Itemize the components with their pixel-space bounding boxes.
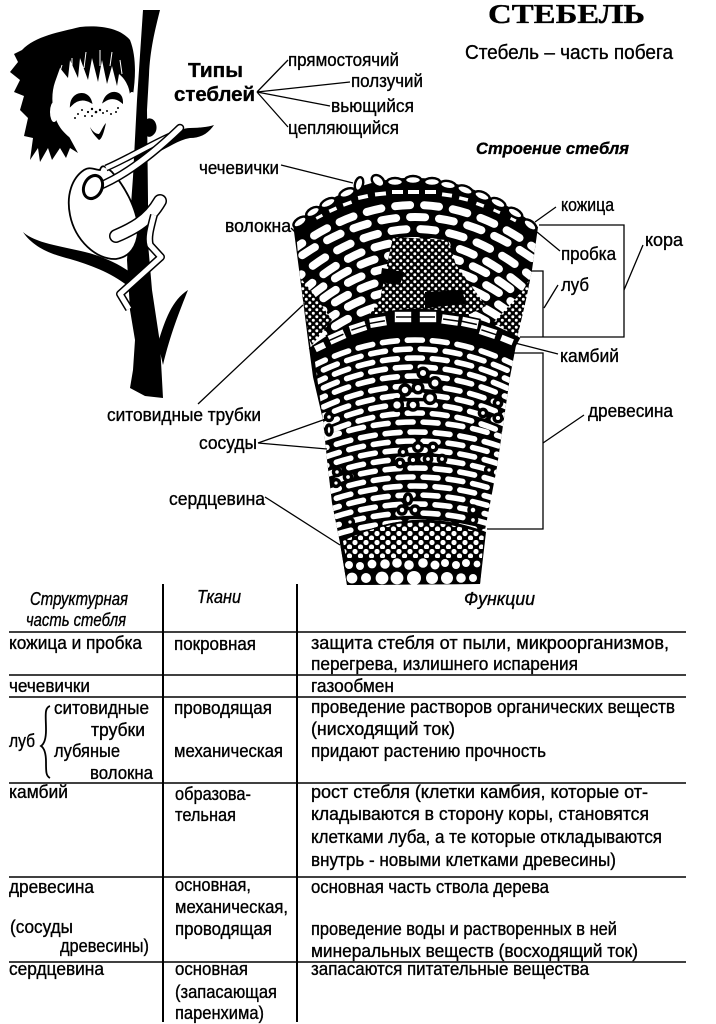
diagram labels and leaders: камбий bbox=[560, 346, 619, 366]
row: phloem: придают растению прочность bbox=[311, 741, 546, 761]
phloem cluster bbox=[370, 237, 486, 314]
ears bbox=[50, 92, 136, 122]
table header: Структурная bbox=[30, 589, 128, 609]
row: cambium: образова- bbox=[175, 784, 251, 804]
row: pith: запасаются питательные вещества bbox=[311, 959, 590, 979]
row: cambium: рост стебля (клетки камбия, которые от- bbox=[311, 782, 648, 802]
table header: Ткани bbox=[197, 587, 241, 607]
row: lenticels bbox=[9, 676, 394, 696]
diagram labels and leaders: кора bbox=[645, 230, 684, 250]
row: wood: (сосуды bbox=[10, 917, 73, 937]
row: wood: основная часть ствола дерева bbox=[311, 877, 550, 897]
lower right branch bbox=[158, 290, 188, 365]
row: pith: основная bbox=[175, 959, 248, 979]
diagram labels and leaders: чечевички bbox=[199, 158, 279, 178]
row: wood: механическая, bbox=[175, 897, 288, 917]
stem types list with connectors: вьющийся bbox=[331, 96, 414, 116]
row: wood bbox=[9, 875, 638, 961]
stem types list with connectors: ползучий bbox=[351, 71, 423, 91]
label: stem types heading: стеблей bbox=[174, 84, 255, 106]
diagram labels and leaders bbox=[107, 158, 684, 545]
eyes bbox=[71, 93, 122, 105]
row: epidermis and cork: перегрева, излишнего испарения bbox=[311, 654, 578, 674]
left branch bbox=[23, 232, 130, 286]
stem silhouette bbox=[293, 178, 538, 585]
subtitle: Стебель – часть побега bbox=[465, 42, 674, 64]
stem types list with connectors bbox=[257, 50, 423, 138]
row: phloem: проведение растворов органических веществ bbox=[311, 697, 675, 717]
table header: часть стебля bbox=[26, 610, 126, 630]
row: wood: проведение воды и растворенных в ней bbox=[311, 919, 617, 939]
row: phloem: механическая bbox=[174, 741, 283, 761]
row: cambium: тельная bbox=[175, 805, 236, 825]
row: wood: древесина bbox=[9, 877, 95, 897]
row: epidermis and cork bbox=[9, 633, 669, 674]
table header: Функции bbox=[464, 589, 535, 609]
row: phloem: (нисходящий ток) bbox=[311, 719, 455, 739]
diagram labels and leaders: луб bbox=[561, 275, 589, 295]
row: phloem: ситовидные bbox=[54, 698, 149, 718]
row: epidermis and cork: покровная bbox=[174, 634, 256, 654]
row: cambium: камбий bbox=[9, 782, 68, 802]
lenticel bbox=[353, 176, 365, 192]
row: phloem: лубяные bbox=[54, 741, 120, 761]
cambium bbox=[313, 311, 517, 354]
row: cambium: внутрь - новыми клетками древесины) bbox=[311, 850, 616, 870]
row: cambium bbox=[9, 782, 662, 870]
vessel clusters bbox=[326, 368, 502, 525]
table header bbox=[26, 587, 535, 630]
row: wood: проводящая bbox=[175, 919, 272, 939]
row: pith: сердцевина bbox=[9, 959, 105, 979]
table bbox=[9, 584, 686, 1023]
plant stem bbox=[127, 10, 163, 398]
row: epidermis and cork: кожица и пробка bbox=[9, 633, 143, 653]
row: phloem bbox=[9, 697, 675, 783]
diagram labels and leaders: пробка bbox=[561, 244, 617, 264]
table rules bbox=[9, 584, 686, 1022]
stem types list with connectors: прямостоячий bbox=[288, 50, 399, 70]
row: phloem: трубки bbox=[91, 720, 145, 740]
diagram: stem cross-section bbox=[290, 173, 540, 585]
fringe strands bbox=[58, 50, 122, 78]
row: wood: минеральных веществ (восходящий ток) bbox=[311, 941, 638, 961]
stem types list with connectors: цепляющийся bbox=[288, 118, 399, 138]
epidermis cells bbox=[292, 173, 538, 233]
label: stem types heading bbox=[174, 60, 255, 106]
diagram labels and leaders: древесина bbox=[588, 401, 674, 421]
row: cambium: кладываются в сторону коры, становятся bbox=[311, 804, 649, 824]
illustration: cartoon character climbing a stem bbox=[10, 10, 214, 398]
front arm bbox=[97, 128, 180, 187]
body bbox=[69, 166, 138, 259]
pith bbox=[340, 520, 486, 585]
row: phloem: волокна bbox=[90, 763, 154, 783]
row: cambium: клетками луба, а те которые откладываются bbox=[311, 827, 662, 847]
diagram heading: Строение стебля bbox=[476, 139, 629, 158]
row: pith bbox=[9, 959, 590, 1023]
bracket lines bbox=[487, 225, 624, 529]
leg bbox=[116, 201, 160, 236]
row: phloem: проводящая bbox=[174, 698, 272, 718]
row: phloem: луб bbox=[9, 731, 35, 751]
mouth bbox=[90, 123, 106, 140]
cortex bbox=[296, 201, 536, 347]
face bbox=[52, 58, 130, 170]
diagram labels and leaders: ситовидные трубки bbox=[107, 405, 261, 425]
row: pith: паренхима) bbox=[175, 1003, 264, 1023]
row: lenticels: газообмен bbox=[311, 676, 394, 696]
phloem black blobs bbox=[380, 268, 466, 308]
wood bbox=[315, 337, 513, 536]
cork layer bbox=[300, 193, 534, 232]
rear arm bbox=[106, 136, 170, 168]
diagram labels and leaders: сердцевина bbox=[169, 489, 266, 509]
row: wood: основная, bbox=[175, 875, 251, 895]
row: lenticels: чечевички bbox=[9, 676, 90, 696]
shoulder bbox=[80, 172, 106, 202]
row: pith: (запасающая bbox=[175, 982, 277, 1002]
diagram labels and leaders: волокна bbox=[225, 216, 292, 236]
row: wood: древесины) bbox=[60, 936, 149, 956]
diagram labels and leaders: кожица bbox=[561, 195, 615, 215]
freckles bbox=[74, 107, 119, 119]
hair bbox=[10, 26, 135, 162]
diagram labels and leaders: сосуды bbox=[199, 433, 257, 453]
top branch bbox=[147, 125, 214, 153]
phloem side clusters bbox=[298, 275, 332, 345]
row: epidermis and cork: защита стебля от пыли, микроорганизмов, bbox=[311, 633, 669, 653]
label: stem types heading: Типы bbox=[188, 60, 243, 82]
